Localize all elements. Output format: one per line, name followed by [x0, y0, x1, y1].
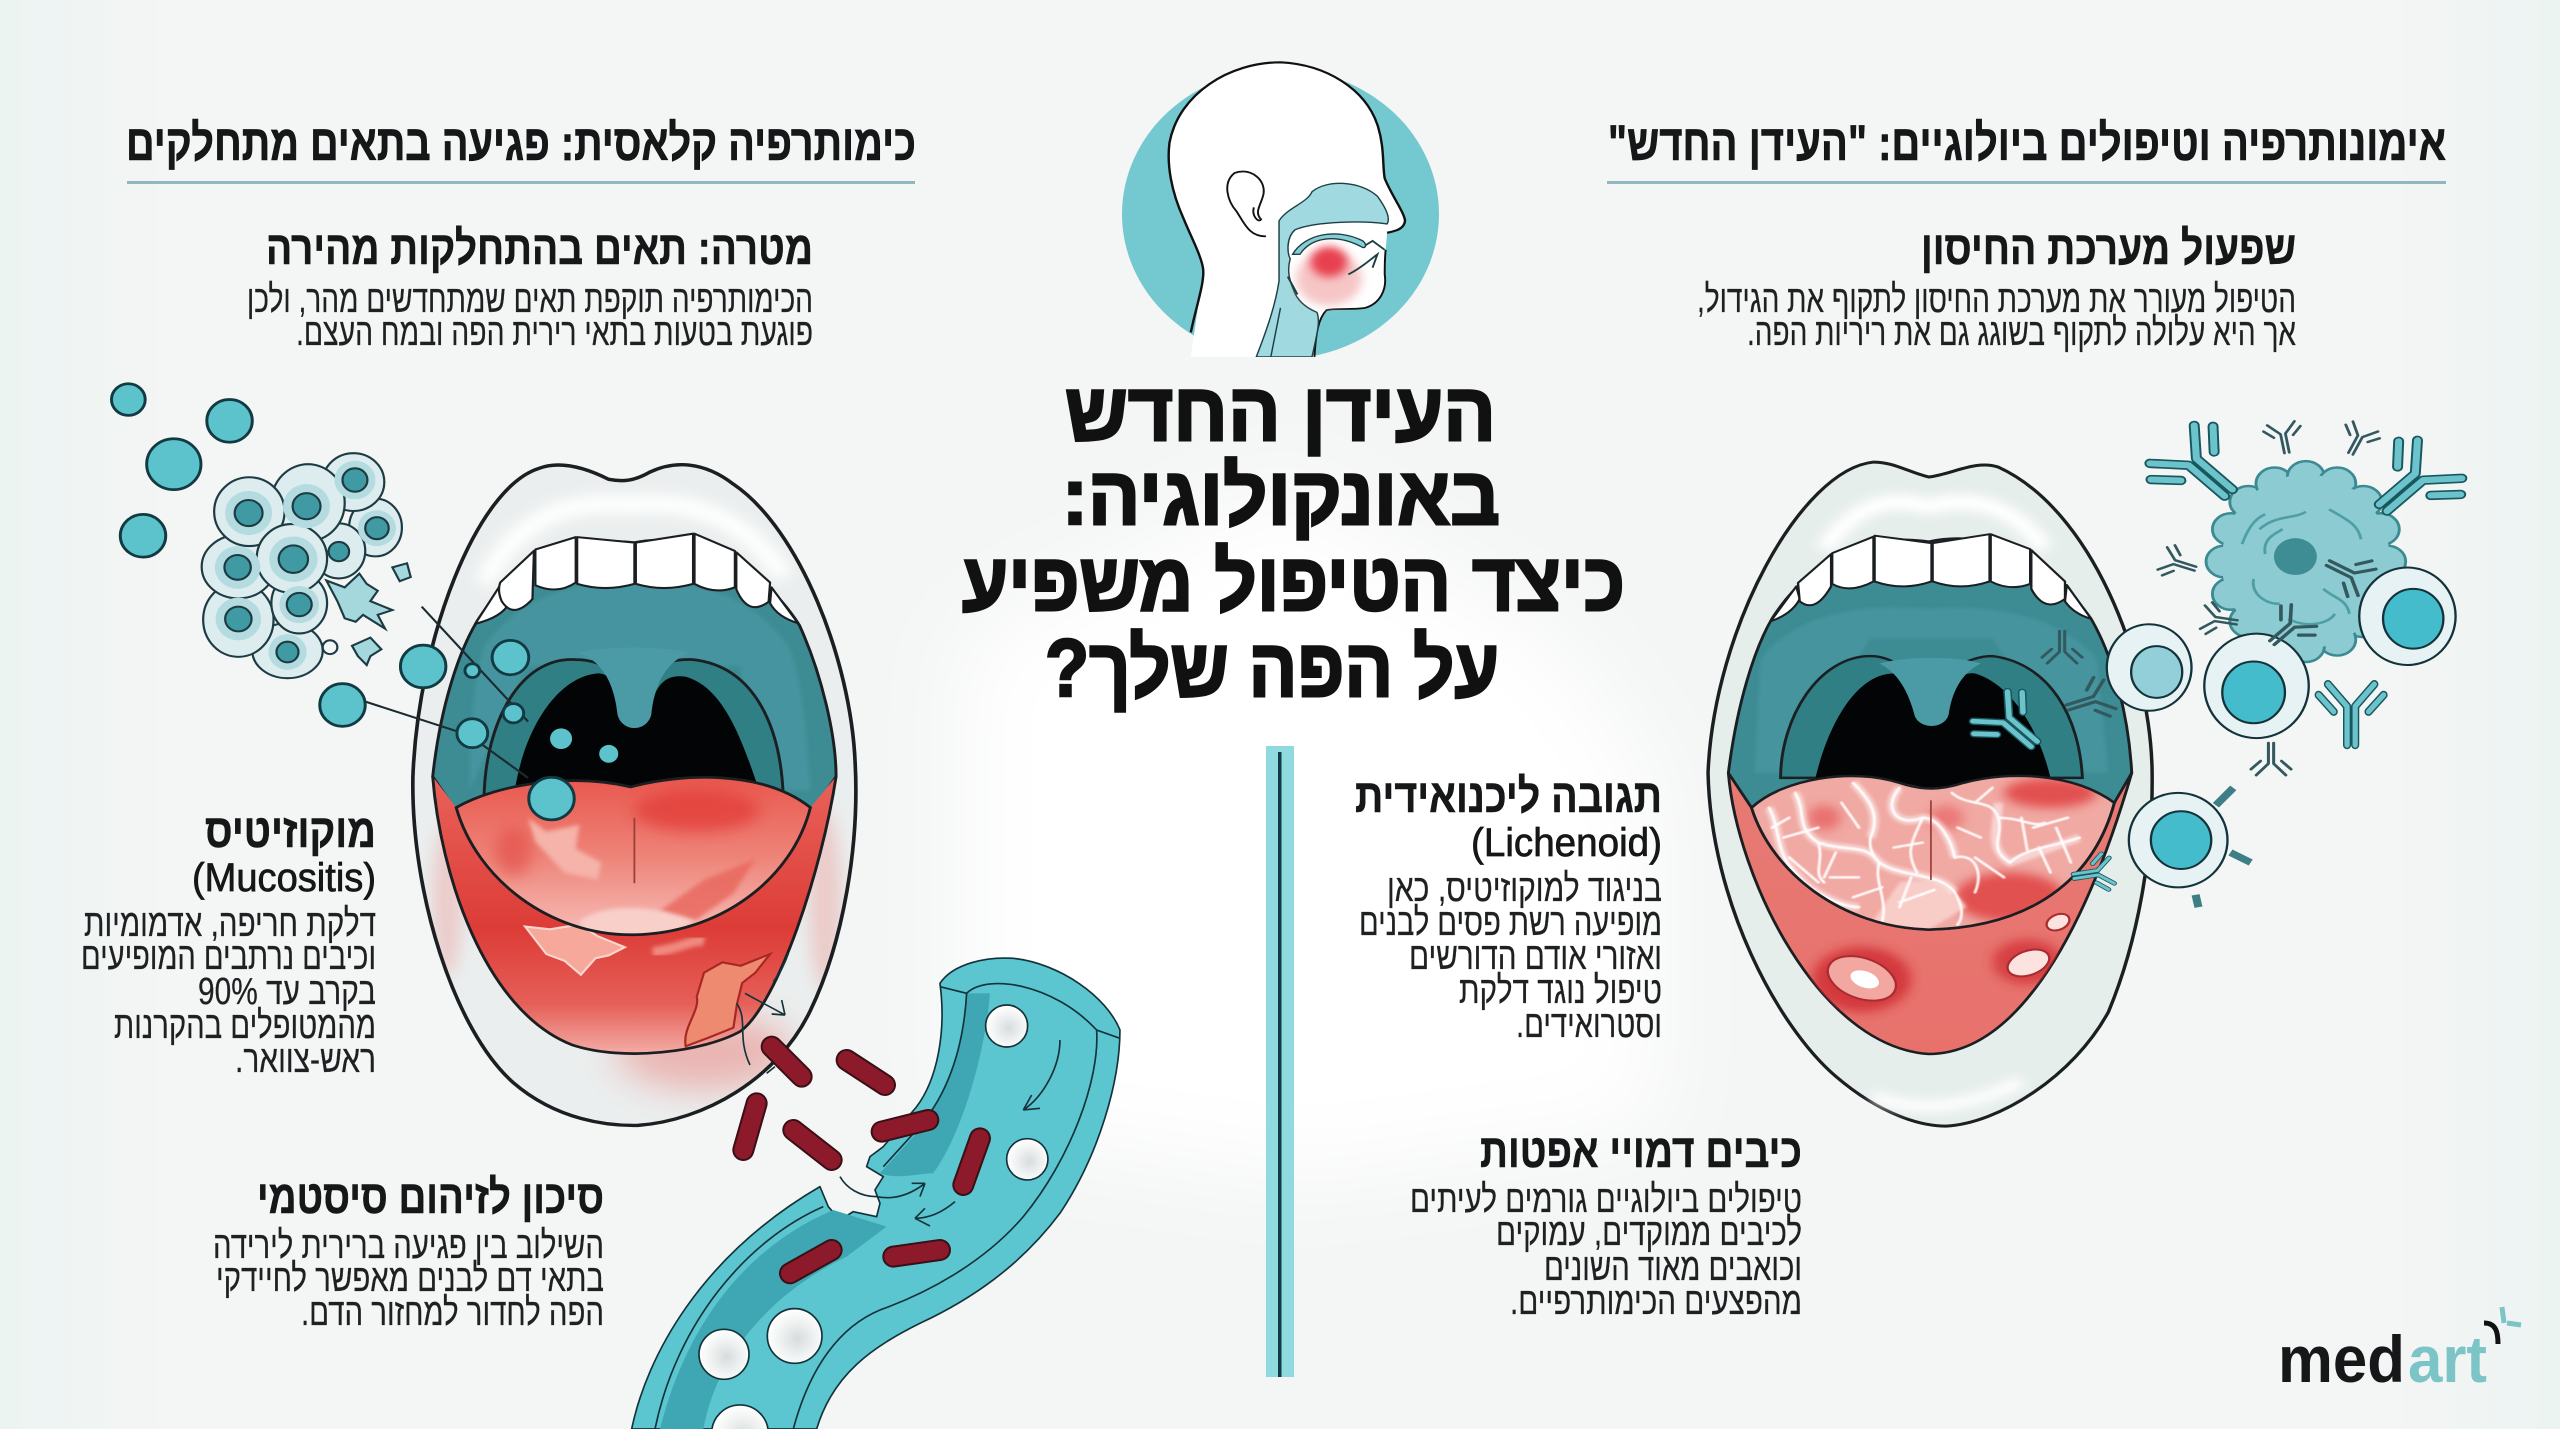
tongue: [456, 777, 810, 942]
icon: ear: [1227, 171, 1266, 236]
text block: mucositis: בקרב עד 90%: [198, 971, 376, 1013]
logo: medart: [2278, 1307, 2521, 1396]
text block: mucositis: ראש-צוואר.: [235, 1039, 376, 1081]
white blood cells: [699, 1005, 1048, 1429]
illustration: left mouth with mucositis: [111, 384, 856, 1125]
text block: lichenoid reaction: מופיעה רשת פסים לבנים: [1359, 902, 1662, 944]
illustration: right mouth with lichenoid reaction: [1708, 418, 2471, 1126]
icon: free radical particles: [111, 384, 618, 820]
text block: mucositis: [81, 804, 376, 1081]
text block: lichenoid reaction: (Lichenoid): [1471, 821, 1662, 865]
text block: target rapidly dividing cells: פוגעת בטעות בתאי רירית הפה ובמח העצם.: [296, 312, 813, 354]
text block: immune activation: [1697, 221, 2296, 354]
icon: tumour cell: [2206, 461, 2406, 662]
text block: aphthous-like ulcers: מהפצעים הכימותרפיים.: [1510, 1281, 1802, 1323]
text block: mucositis: וכיבים נרתבים המופיעים: [81, 936, 376, 978]
divider: central teal bar: [1266, 746, 1294, 1377]
text block: mucositis: דלקת חריפה, אדמומיות: [84, 903, 376, 945]
panel: left column header: [126, 115, 916, 184]
text block: mucositis: מהמטופלים בהקרנות: [114, 1005, 376, 1047]
teeth: [475, 534, 798, 624]
title: באונקולוגיה:: [1062, 451, 1500, 542]
palate and throat: [1728, 539, 2132, 808]
text block: target rapidly dividing cells: [247, 221, 813, 354]
text block: lichenoid reaction: וסטרואידים.: [1516, 1004, 1662, 1046]
text block: mucositis: מוקוזיטיס: [205, 804, 376, 857]
text block: systemic infection risk: השילוב בין פגיעה ברירית לירידה: [213, 1225, 604, 1267]
text block: lichenoid reaction: טיפול נוגד דלקת: [1459, 970, 1662, 1012]
title: כיצד הטיפול משפיע: [962, 537, 1625, 628]
illustration: head profile with inflamed mouth: [1122, 62, 1439, 359]
icon: antibodies: [1966, 418, 2471, 894]
text block: lichenoid reaction: [1355, 769, 1662, 1046]
text block: lichenoid reaction: תגובה ליכנואידית: [1355, 769, 1662, 822]
text block: aphthous-like ulcers: טיפולים ביולוגיים גורמים לעיתים: [1410, 1179, 1802, 1221]
text block: immune activation: הטיפול מעורר את מערכת החיסון לתקוף את הגידול,: [1697, 279, 2296, 321]
text block: immune activation: אך היא עלולה לתקוף בשוגג גם את ריריות הפה.: [1747, 312, 2296, 354]
tongue with white striae: [1752, 776, 2114, 930]
panel: left column header: כימותרפיה קלאסית: פגיעה בתאים מתחלקים: [126, 115, 916, 171]
logo: medart: med: [2278, 1322, 2405, 1396]
illustration: blood vessel with bacteria entering: [632, 953, 1120, 1429]
logo: medart: art: [2408, 1322, 2487, 1396]
title: על הפה שלך?: [1045, 623, 1499, 714]
text block: systemic infection risk: הפה לחדור למחזור הדם.: [301, 1292, 604, 1334]
text block: systemic infection risk: [213, 1170, 604, 1334]
text block: lichenoid reaction: בניגוד למוקוזיטיס, כאן: [1387, 868, 1662, 910]
text block: mucositis: (Mucositis): [192, 856, 376, 900]
text block: aphthous-like ulcers: כיבים דמויי אפטות: [1480, 1124, 1802, 1177]
text block: target rapidly dividing cells: הכימותרפיה תוקפת תאים שמתחדשים מהר, ולכן: [247, 279, 813, 321]
text block: systemic infection risk: סיכון לזיהום סיסטמי: [257, 1170, 604, 1223]
icon: immune T cells: [2107, 568, 2456, 907]
bacteria: [743, 1047, 980, 1273]
text block: lichenoid reaction: ואזורי אודם הדורשים: [1409, 936, 1662, 978]
palate and throat: [433, 540, 836, 814]
text block: aphthous-like ulcers: לכיבים ממוקדים, עמוקים: [1496, 1212, 1802, 1254]
title: העידן החדש: [1065, 367, 1496, 458]
icon: damaged mucosal cell cluster: [202, 453, 411, 678]
floor of mouth with aphthous ulcers: [1728, 773, 2132, 1054]
teeth: [1771, 534, 2091, 621]
text block: target rapidly dividing cells: מטרה: תאים בהתחלקות מהירה: [266, 221, 813, 274]
text block: aphthous-like ulcers: וכואבים מאוד השונים: [1544, 1247, 1802, 1289]
floor of mouth with red inflammation: [433, 777, 836, 1054]
text block: systemic infection risk: בתאי דם לבנים מאפשר לחיידקי: [216, 1258, 604, 1300]
text block: immune activation: שפעול מערכת החיסון: [1921, 221, 2296, 274]
text block: aphthous-like ulcers: [1410, 1124, 1802, 1323]
title: [962, 367, 1625, 714]
connector lines: [363, 607, 528, 778]
